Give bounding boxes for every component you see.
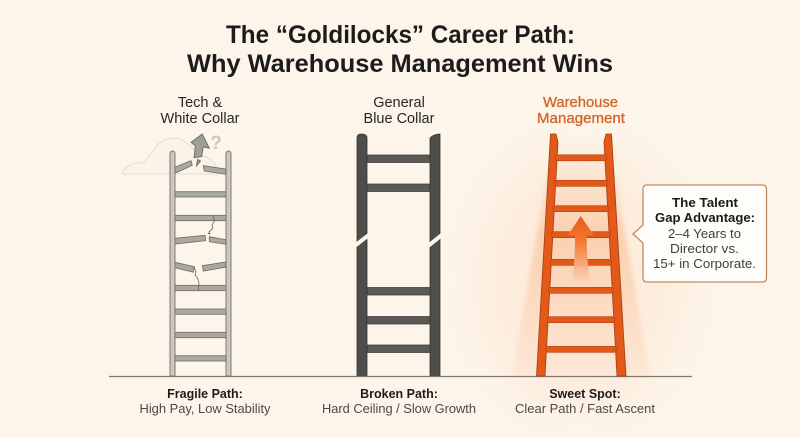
heading: general blue collar: General <box>373 95 425 111</box>
caption: sweet spot <box>515 387 656 416</box>
caption: broken path: Broken Path: <box>360 387 438 401</box>
ladder: fragile <box>170 151 231 376</box>
icon: broken upward arrow <box>191 134 209 166</box>
rails <box>170 151 231 376</box>
outer glow <box>475 150 685 410</box>
callout text: Director vs. <box>670 241 739 256</box>
heading: tech and white collar: Tech & <box>178 95 222 111</box>
heading: warehouse management: Warehouse <box>543 95 618 111</box>
glow behind ladder <box>512 140 650 376</box>
heading: general blue collar <box>364 95 435 127</box>
callout box <box>633 185 766 282</box>
title <box>187 21 613 78</box>
caption: fragile path: High Pay, Low Stability <box>140 402 271 416</box>
icon: upward arrow <box>568 216 594 283</box>
heading: warehouse management <box>537 95 625 127</box>
rails <box>536 134 626 376</box>
heading: tech and white collar: White Collar <box>161 111 240 127</box>
column: general blue collar <box>322 95 476 416</box>
callout text: 2–4 Years to <box>668 226 741 241</box>
heading: tech and white collar <box>161 95 240 127</box>
rungs <box>175 161 226 361</box>
caption: broken path <box>322 387 476 416</box>
callout text: 15+ in Corporate. <box>653 256 756 271</box>
icon: cloud <box>122 138 218 174</box>
title: The “Goldilocks” Career Path: <box>226 21 575 49</box>
column: tech and white collar <box>122 95 271 416</box>
caption: fragile path: Fragile Path: <box>167 387 243 401</box>
title: Why Warehouse Management Wins <box>187 50 613 78</box>
callout text: The Talent <box>672 195 739 210</box>
callout: talent gap advantage <box>633 185 766 282</box>
heading: warehouse management: Management <box>537 111 625 127</box>
caption: sweet spot: Clear Path / Fast Ascent <box>515 402 656 416</box>
ladder: sweet spot <box>536 134 626 376</box>
column: warehouse management <box>109 95 766 416</box>
rungs <box>365 155 432 352</box>
ladder: broken <box>354 134 442 376</box>
rungs <box>545 155 617 352</box>
icon: question mark: ? <box>210 133 222 154</box>
rails <box>357 134 440 376</box>
caption: broken path: Hard Ceiling / Slow Growth <box>322 402 476 416</box>
caption: fragile path <box>140 387 271 416</box>
caption: sweet spot: Sweet Spot: <box>549 387 621 401</box>
heading: general blue collar: Blue Collar <box>364 111 435 127</box>
callout text: Gap Advantage: <box>655 210 755 225</box>
cracks <box>194 216 214 290</box>
ground line <box>109 376 692 378</box>
callout text <box>653 195 756 271</box>
rail breaks <box>354 234 442 246</box>
